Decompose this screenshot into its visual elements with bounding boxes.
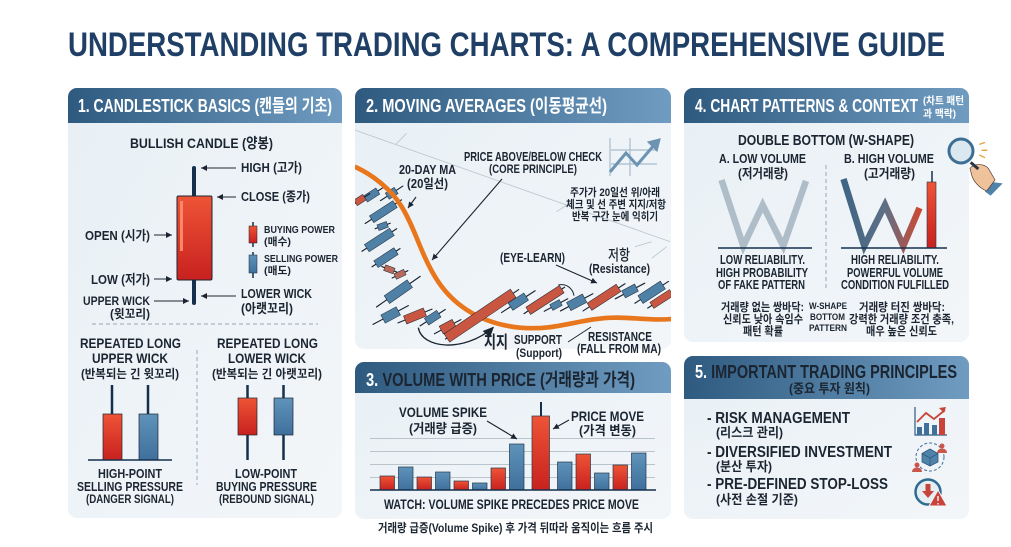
- label: eye-learn and resistance: 저항: [608, 247, 630, 264]
- legend: buying and selling power: BUYING POWER: [264, 224, 335, 236]
- label: 20-day MA with arrow: 20-DAY MA: [399, 162, 457, 177]
- heading: volume with price: [355, 362, 671, 393]
- block: repeated long upper wick: HIGH-POINT: [98, 466, 162, 481]
- item: stop-loss: [707, 476, 888, 507]
- item: stop-loss: - PRE-DEFINED STOP-LOSS: [707, 476, 888, 493]
- korean note: 체크 및 선 주변 지지/저항: [566, 197, 666, 211]
- legend: buying and selling power: SELLING POWER: [264, 253, 338, 265]
- label: eye-learn and resistance: (EYE-LEARN): [500, 250, 565, 265]
- block: repeated long lower wick: [212, 335, 322, 506]
- item: diversified investment: (분산 투자): [716, 459, 772, 474]
- candle part labels with arrows: HIGH (고가): [241, 160, 302, 175]
- candle part labels with arrows: OPEN (시가): [85, 228, 150, 243]
- label: 20-day MA with arrow: [399, 162, 457, 208]
- panel: candlestick basics: [68, 88, 342, 518]
- panel: chart patterns and context: [684, 88, 969, 342]
- korean note: [566, 185, 666, 223]
- pattern A: low volume: [716, 151, 812, 292]
- heading: candlestick basics: [68, 88, 342, 123]
- candle part labels with arrows: (아랫꼬리): [241, 301, 293, 316]
- label: 20-day MA with arrow: (20일선): [407, 177, 448, 191]
- item: diversified investment: - DIVERSIFIED INVESTMENT: [707, 444, 892, 461]
- moving average price chart: [348, 130, 678, 345]
- note: W-shape bottom pattern: W-SHAPE: [809, 301, 847, 312]
- note: high volume korean: 강력한 거래량 조건 충족,: [849, 312, 954, 326]
- label: volume spike with arrow: VOLUME SPIKE: [399, 404, 487, 420]
- pattern B: high volume: [841, 151, 949, 292]
- block: repeated long lower wick: (반복되는 긴 아랫꼬리): [212, 367, 322, 381]
- icon: magnifying glass with hand: [949, 139, 1003, 196]
- pattern B: high volume: POWERFUL VOLUME: [847, 266, 943, 280]
- legend: buying and selling power: [249, 222, 338, 278]
- note: high volume korean: 거래량 터진 쌍바닥:: [859, 300, 945, 314]
- label: volume spike with arrow: (거래량 급증): [409, 421, 477, 436]
- heading: chart patterns: 4. CHART PATTERNS & CONTEXT: [695, 96, 918, 116]
- label: price above below check with arrow: (CORE PRINCIPLE): [489, 162, 577, 176]
- note: low volume korean: 거래량 없는 쌍바닥:: [721, 300, 804, 314]
- item: risk management: [707, 410, 850, 440]
- icon: risk chart: [915, 407, 947, 435]
- heading: candlestick basics: 1. CANDLESTICK BASICS (캔들의 기초): [78, 96, 332, 116]
- label: support: (Support): [516, 346, 562, 360]
- heading: trading principles: (중요 투자 원칙): [789, 381, 870, 396]
- upper wick candles: [88, 385, 172, 460]
- heading: volume with price: 3. VOLUME WITH PRICE (거래량과 가격): [366, 370, 635, 390]
- korean note: 반복 구간 눈에 익히기: [572, 209, 658, 223]
- watch caption: WATCH: VOLUME SPIKE PRECEDES PRICE MOVE: [384, 497, 639, 512]
- item: diversified investment: [707, 444, 892, 474]
- note: high volume korean: [849, 300, 954, 338]
- label: price move with arrow: [553, 408, 644, 438]
- candle part labels with arrows: UPPER WICK: [83, 294, 150, 308]
- label: price move with arrow: (가격 변동): [579, 423, 636, 438]
- heading: moving averages: [355, 88, 671, 123]
- pattern B: high volume: HIGH RELIABILITY.: [851, 253, 939, 267]
- label: support: [484, 332, 562, 360]
- item: risk management: (리스크 관리): [716, 425, 783, 440]
- heading: chart patterns: 과 맥락): [923, 107, 956, 120]
- label: price move with arrow: PRICE MOVE: [571, 408, 644, 424]
- note: low volume korean: 신뢰도 낮아 속임수: [723, 313, 803, 326]
- icon: rising chart arrow: [610, 138, 660, 176]
- note: W-shape bottom pattern: BOTTOM: [810, 312, 845, 323]
- label: volume spike with arrow: [399, 404, 517, 439]
- candle part labels with arrows: LOW (저가): [91, 272, 150, 287]
- candle part labels with arrows: (윗꼬리): [110, 307, 150, 321]
- pattern A: low volume: (저거래량): [738, 166, 788, 181]
- panel: volume with price: [355, 362, 671, 519]
- candle part labels with arrows: LOWER WICK: [241, 286, 312, 301]
- heading: trading principles: [684, 356, 969, 399]
- pattern B: high volume: (고거래량): [864, 166, 915, 181]
- pattern B: high volume: B. HIGH VOLUME: [844, 151, 934, 166]
- label: support: 지지: [484, 333, 508, 352]
- icon: diversification cube: [912, 443, 947, 472]
- block: repeated long upper wick: [77, 335, 183, 506]
- block: repeated long upper wick: UPPER WICK: [92, 350, 168, 366]
- candle part labels with arrows: [83, 160, 312, 321]
- heading: moving averages: 2. MOVING AVERAGES (이동평균선): [366, 96, 607, 116]
- pattern A: low volume: HIGH PROBABILITY: [716, 266, 809, 280]
- block: repeated long lower wick: REPEATED LONG: [217, 335, 318, 351]
- heading: chart patterns: (차트 패턴: [923, 94, 964, 107]
- block: repeated long upper wick: SELLING PRESSURE: [77, 479, 183, 494]
- icon: stop-loss warning: [916, 480, 947, 506]
- legend: buying and selling power: (매수): [264, 235, 291, 248]
- block: repeated long lower wick: (REBOUND SIGNAL): [219, 492, 314, 506]
- block: repeated long upper wick: (반복되는 긴 윗꼬리): [81, 367, 179, 381]
- korean note: 주가가 20일선 위/아래: [570, 185, 660, 199]
- panel: important trading principles: [684, 356, 969, 519]
- pattern B: high volume: CONDITION FULFILLED: [841, 278, 949, 292]
- pattern A: low volume: LOW RELIABILITY.: [720, 253, 805, 267]
- label: eye-learn and resistance: (Resistance): [589, 262, 650, 276]
- label: price above below check with arrow: PRICE ABOVE/BELOW CHECK: [464, 150, 602, 164]
- lower wick candles: [238, 385, 293, 460]
- heading: chart patterns: [684, 88, 969, 123]
- block: repeated long lower wick: BUYING PRESSURE: [216, 479, 317, 494]
- block: repeated long lower wick: LOWER WICK: [228, 350, 306, 366]
- legend: buying and selling power: (매도): [264, 264, 291, 277]
- korean footnote: 거래량 급증(Volume Spike) 후 가격 뒤따라 움직이는 흐름 주시: [378, 520, 653, 535]
- block: repeated long lower wick: LOW-POINT: [235, 466, 297, 481]
- note: W-shape bottom pattern: [809, 301, 847, 334]
- note: W-shape bottom pattern: PATTERN: [809, 323, 847, 334]
- item: stop-loss: (사전 손절 기준): [716, 492, 798, 507]
- note: low volume korean: 패턴 확률: [743, 324, 783, 338]
- label: resistance fall from MA: RESISTANCE: [588, 329, 652, 344]
- pattern A: low volume: A. LOW VOLUME: [719, 151, 806, 166]
- block: repeated long upper wick: REPEATED LONG: [80, 335, 181, 351]
- block: repeated long upper wick: (DANGER SIGNAL): [86, 492, 174, 506]
- item: risk management: - RISK MANAGEMENT: [707, 410, 850, 427]
- subheading: double bottom: DOUBLE BOTTOM (W-SHAPE): [738, 133, 914, 149]
- label: resistance fall from MA: [568, 327, 661, 356]
- pattern A: low volume: OF FAKE PATTERN: [718, 278, 805, 292]
- label: support: SUPPORT: [514, 332, 562, 347]
- note: high volume korean: 매우 높은 신뢰도: [866, 324, 937, 338]
- candle part labels with arrows: CLOSE (종가): [241, 189, 310, 204]
- bullish candle diagram: [177, 166, 212, 305]
- panel: moving averages: [348, 88, 678, 360]
- label: resistance fall from MA: (FALL FROM MA): [577, 342, 661, 356]
- subheading: bullish candle: BULLISH CANDLE (양봉): [130, 135, 273, 151]
- note: low volume korean: [721, 300, 804, 338]
- volume bar chart: [370, 402, 656, 490]
- label: price above below check with arrow: [432, 150, 602, 260]
- label: eye-learn and resistance: [500, 247, 650, 283]
- heading: trading principles: 5. IMPORTANT TRADING PRINCIPLES: [695, 362, 957, 382]
